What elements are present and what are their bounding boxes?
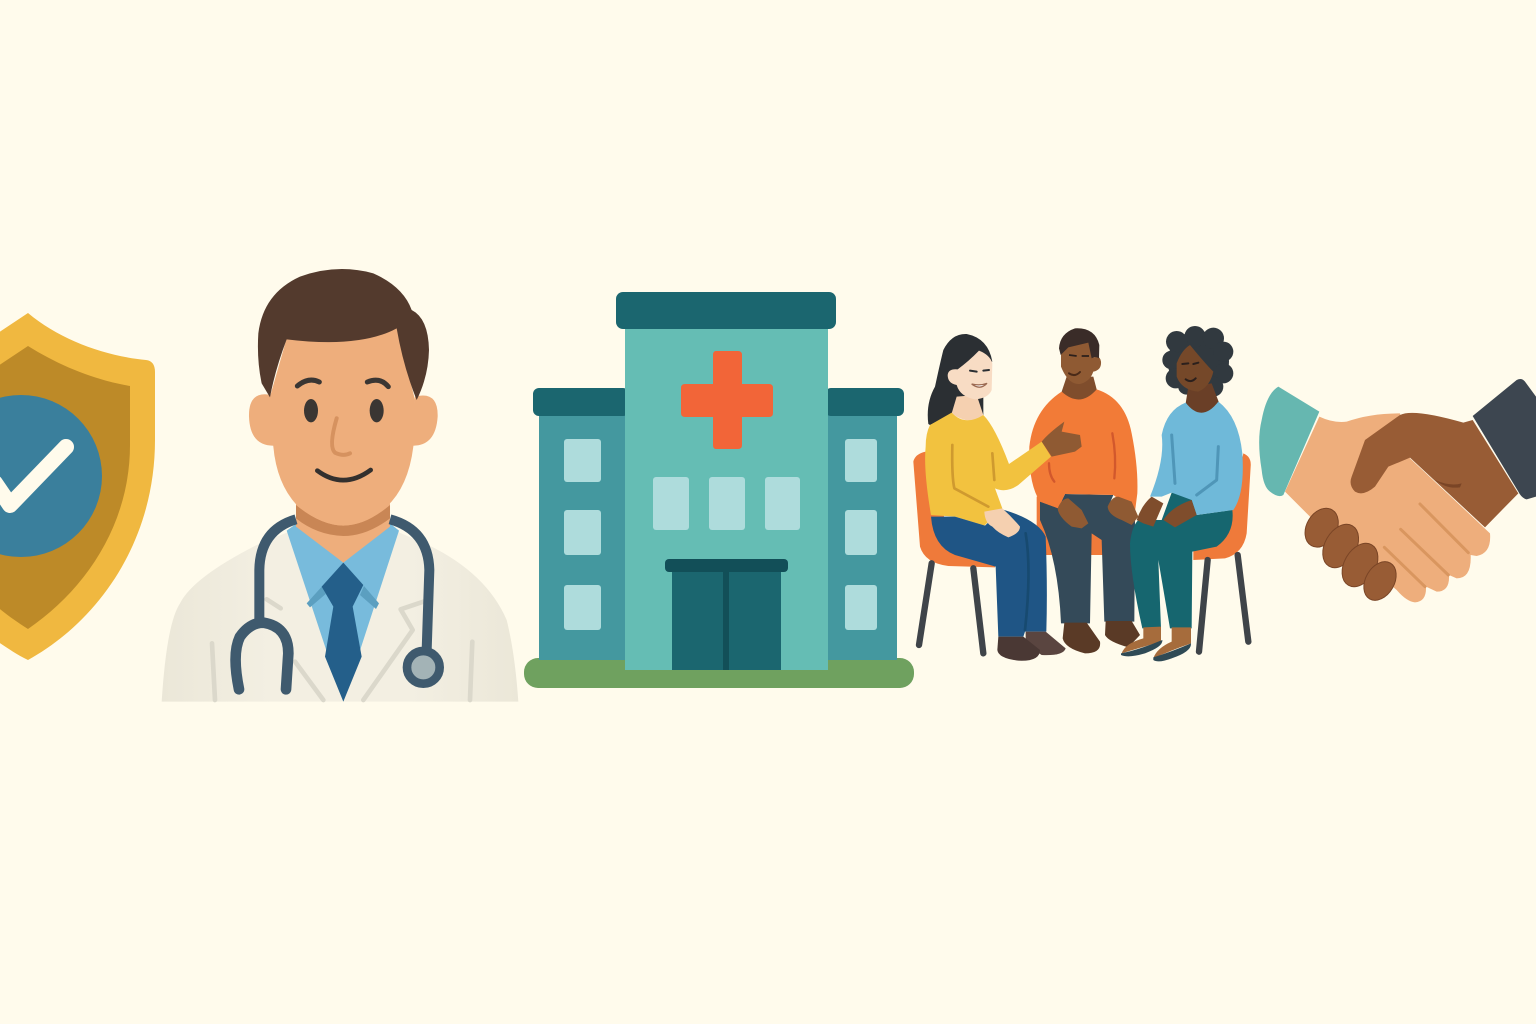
chairs [913, 452, 1251, 653]
fingers [1298, 502, 1403, 606]
hospital windows [564, 439, 877, 630]
left sleeve [1259, 387, 1319, 496]
hospital ground [524, 658, 914, 688]
hospital door [672, 568, 781, 670]
doctor collar folds [307, 586, 379, 609]
doctor hair [258, 269, 429, 400]
hospital tower [625, 320, 828, 670]
stethoscope [236, 519, 440, 689]
doctor shirt [287, 523, 399, 702]
doctor eyes [304, 399, 384, 422]
hand crease [1435, 480, 1462, 488]
doctor coat [162, 530, 518, 702]
person: left woman [925, 334, 1082, 661]
doctor neck [296, 503, 390, 563]
hospital left wing [539, 410, 629, 660]
icon: shield with check [0, 313, 155, 660]
hospital right wing [825, 410, 897, 660]
icon: doctor [162, 269, 518, 702]
light hand [1285, 413, 1490, 602]
illustration: three seated people [913, 326, 1251, 661]
doctor tie [322, 563, 363, 702]
doctor face [270, 327, 415, 526]
dark hand [1351, 413, 1518, 527]
finger lines [1384, 504, 1468, 587]
doctor ears [249, 394, 438, 446]
icon: handshake [1259, 379, 1536, 606]
doctor neck shadow [296, 505, 390, 536]
right sleeve [1473, 379, 1536, 499]
icon: hospital [524, 292, 914, 688]
person: right woman [1121, 326, 1243, 661]
person: centre man [1029, 328, 1140, 653]
doctor brows, nose and smile [297, 380, 388, 480]
coat fold lines [212, 599, 472, 700]
hospital red cross [681, 351, 773, 449]
